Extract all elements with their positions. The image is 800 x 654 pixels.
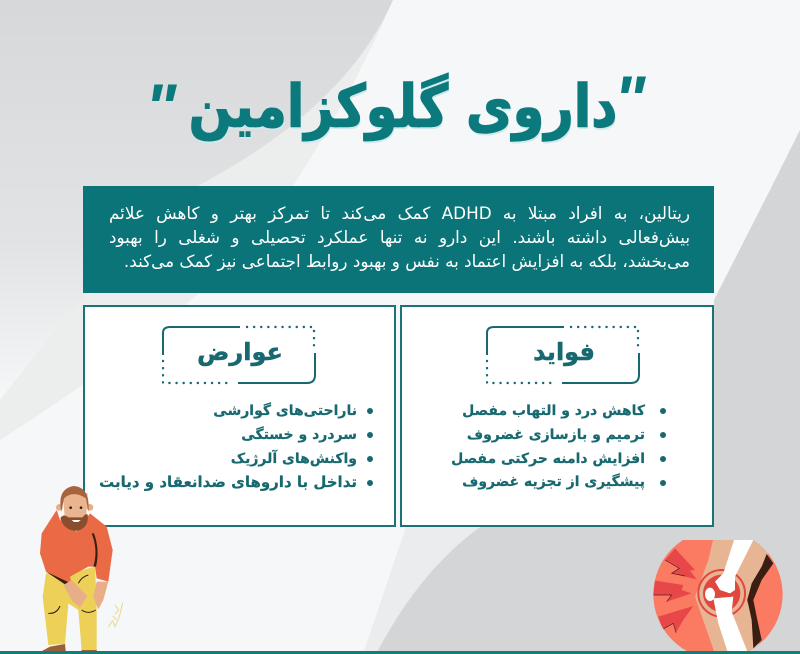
panel: intro text: ریتالین، به افراد مبتلا به ADHD کمک می‌کند تا تمرکز بهتر و کاهش علائم [109,203,690,223]
icon: inflamed knee joint [653,540,783,651]
list: benefits: ترمیم و بازسازی غضروف [467,427,645,443]
title: " [145,70,176,144]
heading: benefits: فواید [533,338,595,366]
panel: intro text [83,186,714,293]
panel: benefits [400,305,714,527]
skin [695,540,768,651]
bones [715,540,754,594]
hair [60,486,89,512]
panel: side effects [83,305,396,527]
hands [63,580,87,607]
legs [43,567,97,650]
shoes [37,644,97,654]
icon: man holding painful knee [40,486,124,651]
knee creases [48,575,96,613]
list: side effects: سردرد و خستگی [241,427,357,443]
inflamed joint rings [698,570,745,617]
heading: side effects [162,326,316,384]
eyes [69,506,72,509]
list: benefits: افزایش دامنه حرکتی مفصل [451,451,645,467]
dark leg outline [747,554,773,648]
mouth [72,520,81,522]
sweater [40,510,113,585]
panel: intro text: می‌بخشد، بلکه به افزایش اعتماد به نفس و بهبود روابط اجتماعی نیز کمک می‌کند. [124,251,690,271]
title: داروی گلوکزامین [189,74,617,141]
sweater shadow [46,533,98,587]
list: side effects: واکنش‌های آلرژیک [231,451,357,467]
heading: benefits [486,326,640,384]
list: side effects: ناراحتی‌های گوارشی [213,403,357,419]
pain bolts [665,548,697,579]
list: benefits: کاهش درد و التهاب مفصل [462,403,645,419]
bottom rule [0,651,800,654]
ears and face [56,504,63,511]
list: side effects: تداخل با داروهای ضدانعقاد و دیابت [99,473,357,491]
title: " [614,62,645,136]
list: side effects [99,402,373,491]
list: benefits: پیشگیری از تجزیه غضروف [462,474,645,490]
list: benefits [451,403,666,490]
beard [60,514,88,531]
knee pain marks [108,603,123,627]
panel: intro text: بیش‌فعالی داشته باشند. این دارو نه تنها عملکرد تحصیلی و شغلی را بهبود [109,227,690,247]
bolt outlines [653,560,685,633]
heading: side effects: عوارض [197,338,283,366]
